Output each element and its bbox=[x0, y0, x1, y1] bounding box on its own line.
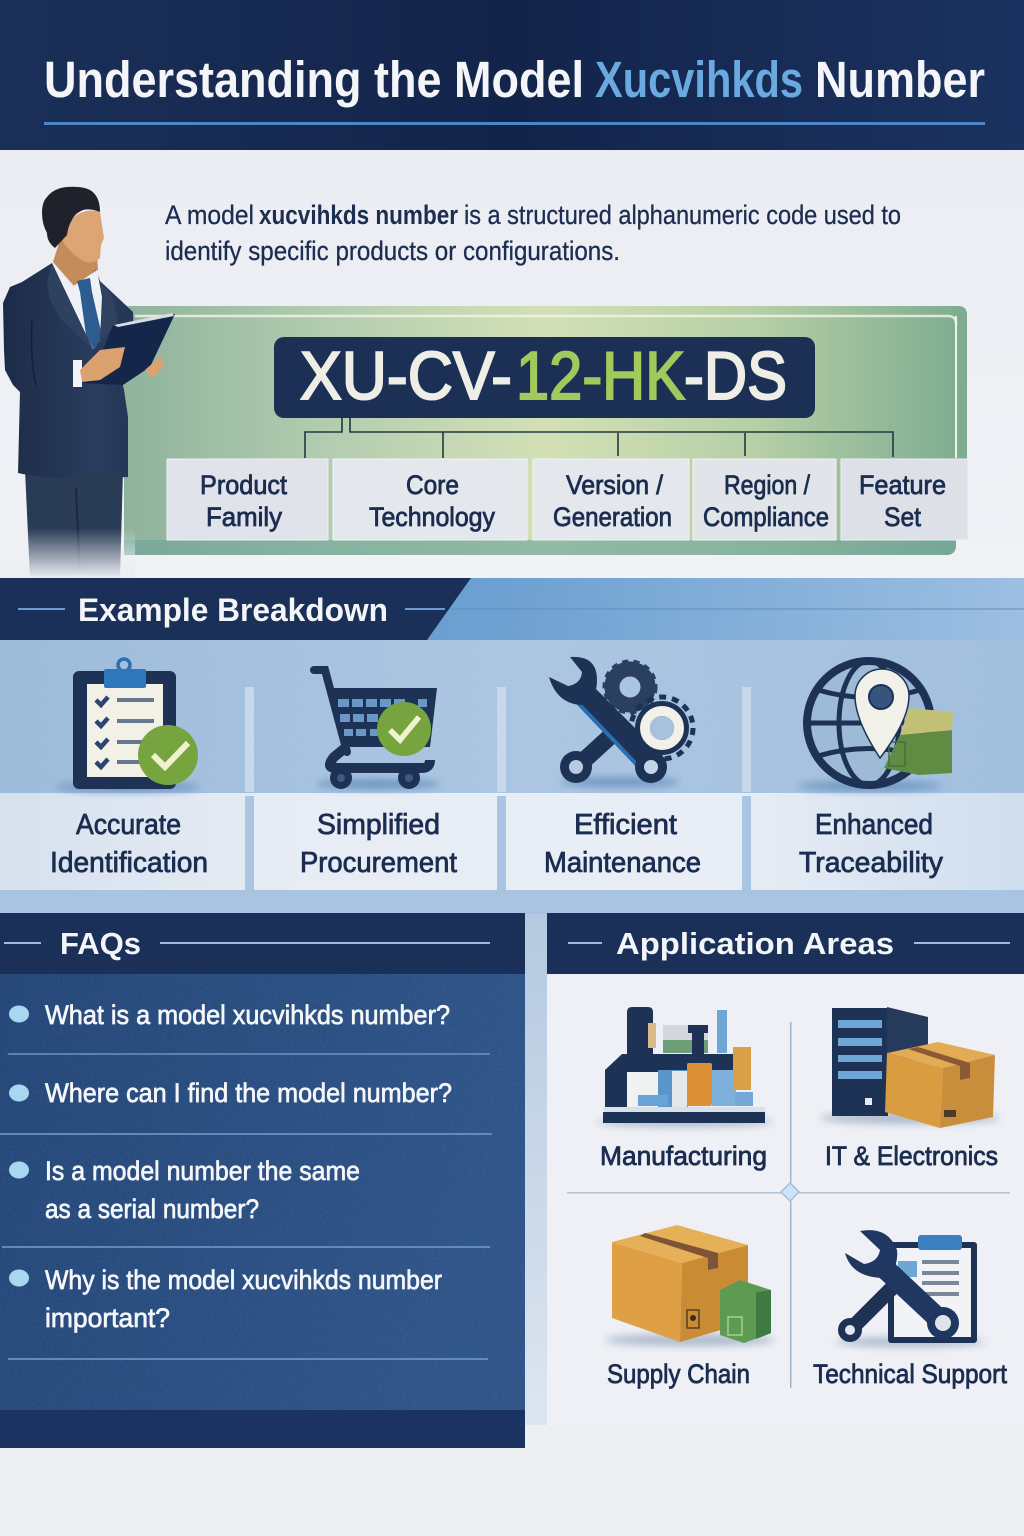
section heading bbox=[0, 578, 471, 640]
benefit label: efficient maintenance: Efficient bbox=[574, 809, 677, 841]
intro text: is a structured alphanumeric code used to bbox=[464, 200, 901, 230]
FAQ item 3: as a serial number? bbox=[45, 1194, 259, 1224]
benefit label: simplified procurement bbox=[300, 809, 457, 879]
code badge: XU-CV- bbox=[300, 338, 512, 414]
label: core technology: Technology bbox=[369, 502, 495, 532]
code badge bbox=[274, 337, 815, 418]
label: version generation: Version / bbox=[566, 470, 663, 500]
label: version generation bbox=[533, 459, 689, 540]
label: region compliance bbox=[693, 459, 836, 540]
benefit label: accurate identification: Accurate bbox=[76, 809, 181, 841]
benefit label: enhanced traceability: Enhanced bbox=[815, 809, 933, 841]
label: core technology bbox=[333, 459, 527, 540]
section heading: Example Breakdown bbox=[78, 592, 388, 628]
panel: FAQs bbox=[0, 913, 525, 1448]
trousers bbox=[25, 470, 123, 578]
intro text: xucvihkds number bbox=[259, 200, 458, 230]
businessman illustration bbox=[0, 187, 175, 578]
cuff bbox=[73, 360, 82, 387]
benefit label: simplified procurement: Simplified bbox=[317, 809, 440, 841]
FAQ item 4: important? bbox=[45, 1303, 170, 1333]
column dividers bbox=[245, 687, 751, 792]
connector lines bbox=[305, 418, 893, 458]
benefit label: enhanced traceability: Traceability bbox=[799, 847, 943, 879]
label: region compliance: Region / bbox=[724, 470, 810, 500]
benefit label: simplified procurement: Procurement bbox=[300, 847, 457, 879]
sleeve shading bbox=[32, 320, 36, 385]
area label: manufacturing: Manufacturing bbox=[600, 1141, 767, 1171]
FAQ item 3: Is a model number the same bbox=[45, 1156, 360, 1186]
icon: shopping cart bbox=[314, 670, 440, 789]
panel: application areas bbox=[547, 913, 1024, 1425]
jacket bbox=[3, 263, 134, 478]
lower fade bbox=[0, 528, 135, 578]
label: product family: Product bbox=[200, 470, 287, 500]
hands bbox=[80, 347, 125, 382]
FAQ item 4: Why is the model xucvihkds number bbox=[45, 1265, 442, 1295]
benefit label: enhanced traceability bbox=[799, 809, 943, 879]
icon: globe with pin and box bbox=[798, 661, 953, 791]
label: version generation: Generation bbox=[553, 502, 672, 532]
label: product family bbox=[167, 459, 328, 540]
icon: manufacturing bbox=[597, 1007, 773, 1127]
FAQ heading: FAQs bbox=[60, 926, 141, 961]
icon: supply chain box bbox=[605, 1225, 775, 1346]
section: example breakdown bbox=[0, 578, 1024, 914]
shirt bbox=[52, 263, 102, 349]
right lapel bbox=[99, 282, 118, 345]
clipboard bbox=[82, 314, 175, 385]
label: core technology: Core bbox=[406, 470, 459, 500]
neck bbox=[53, 240, 98, 286]
code badge: -DS bbox=[684, 338, 787, 414]
icon: technical support bbox=[835, 1230, 985, 1347]
intro text: A model bbox=[165, 200, 254, 230]
intro text bbox=[165, 200, 901, 266]
FAQ item 4 bbox=[9, 1265, 442, 1333]
label: feature set: Feature bbox=[859, 470, 946, 500]
face bbox=[62, 210, 104, 262]
icon: wrench and gears bbox=[549, 657, 693, 787]
left lapel bbox=[47, 263, 92, 349]
benefit label: accurate identification: Identification bbox=[50, 847, 208, 879]
header band bbox=[0, 0, 1024, 150]
label: feature set bbox=[841, 459, 968, 540]
label: region compliance: Compliance bbox=[703, 502, 829, 532]
label: feature set: Set bbox=[884, 502, 921, 532]
icon: IT server and box bbox=[820, 1007, 1000, 1128]
title: Xucvihkds bbox=[595, 51, 803, 108]
title: Number bbox=[815, 51, 985, 108]
benefit label: accurate identification bbox=[50, 809, 208, 879]
area label: IT and electronics: IT & Electronics bbox=[825, 1141, 998, 1171]
code badge: 12-HK bbox=[516, 338, 685, 414]
tie bbox=[77, 278, 102, 350]
gutter between panels bbox=[525, 914, 547, 1425]
intro text: identify specific products or configurations. bbox=[165, 236, 620, 266]
application heading: Application Areas bbox=[616, 926, 894, 961]
label: product family: Family bbox=[206, 502, 282, 532]
FAQ item 3 bbox=[9, 1156, 360, 1224]
hair bbox=[42, 187, 100, 248]
FAQ item 1: What is a model xucvihkds number? bbox=[45, 1000, 450, 1030]
title bbox=[44, 51, 985, 108]
benefit label: efficient maintenance bbox=[544, 809, 701, 879]
area label: technical support: Technical Support bbox=[813, 1359, 1007, 1389]
title: Understanding the Model bbox=[44, 51, 584, 108]
icon: clipboard checklist bbox=[56, 659, 200, 792]
panel: code diagram bbox=[124, 306, 968, 555]
FAQ item 2: Where can I find the model number? bbox=[45, 1078, 452, 1108]
benefit label: efficient maintenance: Maintenance bbox=[544, 847, 701, 879]
area label: supply chain: Supply Chain bbox=[607, 1359, 750, 1389]
